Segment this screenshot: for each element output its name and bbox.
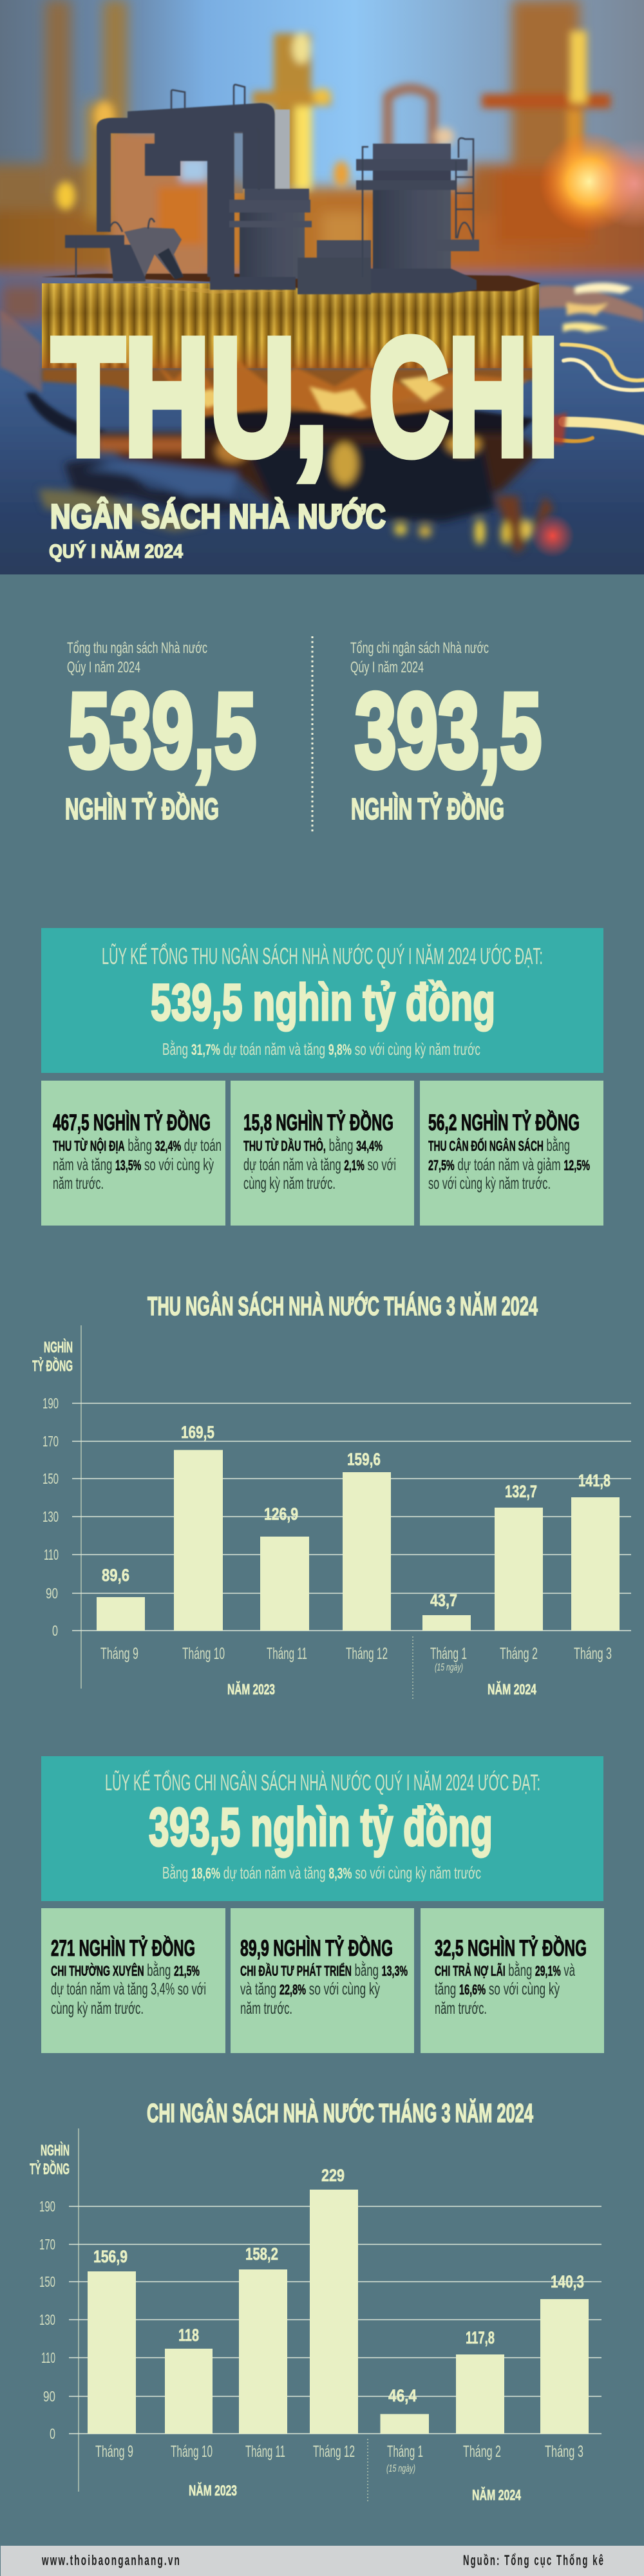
card description: năm trước. <box>435 1998 487 2018</box>
revenue label <box>67 639 207 676</box>
website: www.thoibaonganhang.vn <box>41 2552 181 2568</box>
dark reflection <box>26 393 535 438</box>
card description: tăng 16,6% so với cùng kỳ <box>435 1979 560 1998</box>
card: crude oil revenue <box>231 1081 414 1226</box>
card description: cùng kỳ năm trước. <box>51 1998 144 2018</box>
revenue label: Tổng thu ngân sách Nhà nước <box>67 639 207 657</box>
value labels: 117,8 <box>466 2328 495 2347</box>
card description: so với cùng kỳ năm trước. <box>428 1173 551 1193</box>
card value: 271 NGHÌN TỶ ĐỒNG <box>51 1935 195 1961</box>
card description <box>53 1135 222 1193</box>
panel: total revenue <box>65 639 256 826</box>
axis ticks: 90 <box>43 2388 55 2405</box>
axis unit <box>30 2141 70 2178</box>
value labels: 43,7 <box>430 1591 457 1610</box>
card description: cùng kỳ năm trước. <box>243 1173 336 1193</box>
machinery <box>65 84 479 294</box>
value labels: 229 <box>321 2166 345 2185</box>
expenditure number: 393,5 <box>355 671 542 790</box>
month labels <box>100 1645 612 1673</box>
month labels: (15 ngày) <box>435 1662 463 1673</box>
card description: năm và tăng 13,5% so với cùng kỳ <box>53 1155 214 1174</box>
card description <box>435 1960 575 2018</box>
axis ticks: 150 <box>39 2273 55 2290</box>
month labels: Tháng 2 <box>463 2443 501 2461</box>
subtitle: Ngân sách nhà nước: NGÂN SÁCH NHÀ NƯỚC <box>50 497 386 536</box>
card value: 15,8 NGHÌN TỶ ĐỒNG <box>243 1110 393 1135</box>
axis ticks: 170 <box>39 2236 55 2253</box>
month labels: Tháng 10 <box>171 2443 213 2461</box>
water reflections <box>0 283 644 393</box>
axis ticks: 190 <box>43 1395 59 1412</box>
axis unit: TỶ ĐỒNG <box>32 1356 73 1375</box>
axis unit: NGHÌN <box>44 1338 73 1356</box>
value labels: 169,5 <box>181 1423 214 1442</box>
axis unit <box>32 1338 73 1375</box>
axis ticks: 0 <box>50 2425 55 2442</box>
month labels <box>95 2443 583 2474</box>
axis ticks: 130 <box>39 2311 55 2328</box>
year labels: NĂM 2024 <box>488 1680 536 1698</box>
month labels: Tháng 9 <box>95 2443 133 2461</box>
year labels <box>189 2481 521 2503</box>
axis ticks <box>43 1395 59 1639</box>
axis unit: NGHÌN <box>41 2141 70 2159</box>
month labels: Tháng 3 <box>574 1645 612 1663</box>
expenditure label: Qúy I năm 2024 <box>350 659 424 676</box>
card: domestic revenue <box>41 1081 225 1226</box>
month labels: Tháng 3 <box>545 2443 583 2461</box>
value labels <box>93 2166 584 2405</box>
expenditure label: Tổng chi ngân sách Nhà nước <box>350 639 489 657</box>
card description: CHI ĐẦU TƯ PHÁT TRIỂN bằng 13,3% <box>240 1960 408 1980</box>
gold gear <box>42 283 539 368</box>
card value: 89,9 NGHÌN TỶ ĐỒNG <box>240 1935 393 1961</box>
card description: THU TỪ DẦU THÔ, bằng 34,4% <box>243 1135 383 1155</box>
value labels: 132,7 <box>505 1482 537 1501</box>
card description: năm trước. <box>240 1998 292 2018</box>
title: THU, CHI: THU, <box>52 305 328 489</box>
panel: total expenditure <box>350 639 542 826</box>
banner value: 539,5 nghìn tỷ đồng <box>151 974 495 1032</box>
card: budget balance revenue <box>420 1081 603 1226</box>
value labels: 156,9 <box>93 2247 128 2266</box>
year labels: NĂM 2023 <box>227 1680 275 1698</box>
month labels: Tháng 12 <box>313 2443 355 2461</box>
month labels: (15 ngày) <box>386 2463 415 2474</box>
card description: và tăng 22,8% so với cùng kỳ <box>240 1979 380 1998</box>
card description: CHI TRẢ NỢ LÃI bằng 29,1% và <box>435 1960 575 1980</box>
axis ticks: 170 <box>43 1433 59 1450</box>
panel: cumulative expenditure banner <box>41 1756 603 1901</box>
banner value: 393,5 nghìn tỷ đồng <box>149 1797 493 1857</box>
bars <box>97 1450 620 1631</box>
year labels: NĂM 2023 <box>189 2481 237 2499</box>
value labels <box>102 1423 611 1610</box>
card description: năm trước. <box>53 1173 104 1193</box>
axis ticks <box>39 2198 55 2442</box>
axis ticks: 110 <box>44 1546 59 1563</box>
expenditure label <box>350 639 489 676</box>
card value: 467,5 NGHÌN TỶ ĐỒNG <box>53 1110 211 1135</box>
card description <box>240 1960 408 2018</box>
subtitle: Quý I năm 2024: QUÝ I NĂM 2024 <box>49 540 183 562</box>
year labels: NĂM 2024 <box>472 2486 521 2503</box>
card description: THU CÂN ĐỐI NGÂN SÁCH bằng <box>428 1135 570 1155</box>
axis ticks: 110 <box>41 2349 55 2366</box>
month labels: Tháng 1 <box>387 2443 423 2461</box>
card: recurrent spending <box>41 1908 225 2053</box>
card description: 27,5% dự toán năm và giảm 12,5% <box>428 1155 590 1174</box>
bars <box>88 2190 589 2434</box>
card description <box>428 1135 590 1193</box>
revenue unit: NGHÌN TỶ ĐỒNG <box>65 792 219 826</box>
value labels: 89,6 <box>102 1566 129 1585</box>
bar chart: monthly expenditure <box>30 2128 601 2503</box>
value labels: 159,6 <box>347 1450 381 1469</box>
month labels: Tháng 12 <box>346 1645 388 1663</box>
panel: cumulative revenue banner <box>41 928 603 1073</box>
axis ticks: 150 <box>43 1470 59 1487</box>
expenditure unit: NGHÌN TỶ ĐỒNG <box>351 792 504 826</box>
year labels <box>227 1680 536 1698</box>
card description <box>243 1135 396 1193</box>
card description: THU TỪ NỘI ĐỊA bằng 32,4% dự toán <box>53 1135 222 1155</box>
axis ticks: 130 <box>43 1508 59 1525</box>
value labels: 118 <box>178 2325 199 2345</box>
axis unit: TỶ ĐỒNG <box>30 2159 70 2178</box>
axis ticks: 190 <box>39 2198 55 2215</box>
month labels: Tháng 11 <box>267 1645 307 1663</box>
card description: dự toán năm và tăng 2,1% so với <box>243 1155 396 1174</box>
value labels: 141,8 <box>578 1471 611 1490</box>
month labels: Tháng 1 <box>430 1645 467 1663</box>
card description <box>51 1960 206 2018</box>
revenue number: 539,5 <box>68 671 256 790</box>
value labels: 158,2 <box>245 2244 278 2264</box>
month labels: Tháng 10 <box>182 1645 225 1663</box>
footer bar <box>1 2546 644 2576</box>
banner note: Bằng 18,6% dự toán năm và tăng 8,3% so với cùng kỳ năm trước <box>162 1863 481 1882</box>
axis ticks: 90 <box>46 1585 58 1602</box>
month labels: Tháng 11 <box>245 2443 285 2461</box>
card: interest payments <box>421 1908 604 2053</box>
revenue label: Qúy I năm 2024 <box>67 659 140 676</box>
month labels: Tháng 9 <box>100 1645 138 1663</box>
value labels: 140,3 <box>551 2272 584 2291</box>
value labels: 46,4 <box>388 2386 417 2405</box>
month labels: Tháng 2 <box>500 1645 538 1663</box>
card description: dự toán năm và tăng 3,4% so với <box>51 1979 206 1998</box>
bar chart: monthly revenue <box>32 1325 631 1701</box>
card description: CHI THƯỜNG XUYÊN bằng 21,5% <box>51 1960 200 1980</box>
value labels: 126,9 <box>264 1504 298 1524</box>
banner note: Bằng 31,7% dự toán năm và tăng 9,8% so với cùng kỳ năm trước <box>162 1039 480 1059</box>
axis ticks: 0 <box>52 1622 58 1639</box>
card: development investment <box>231 1908 414 2053</box>
hero photo: refinery on a gold gear <box>0 0 644 596</box>
